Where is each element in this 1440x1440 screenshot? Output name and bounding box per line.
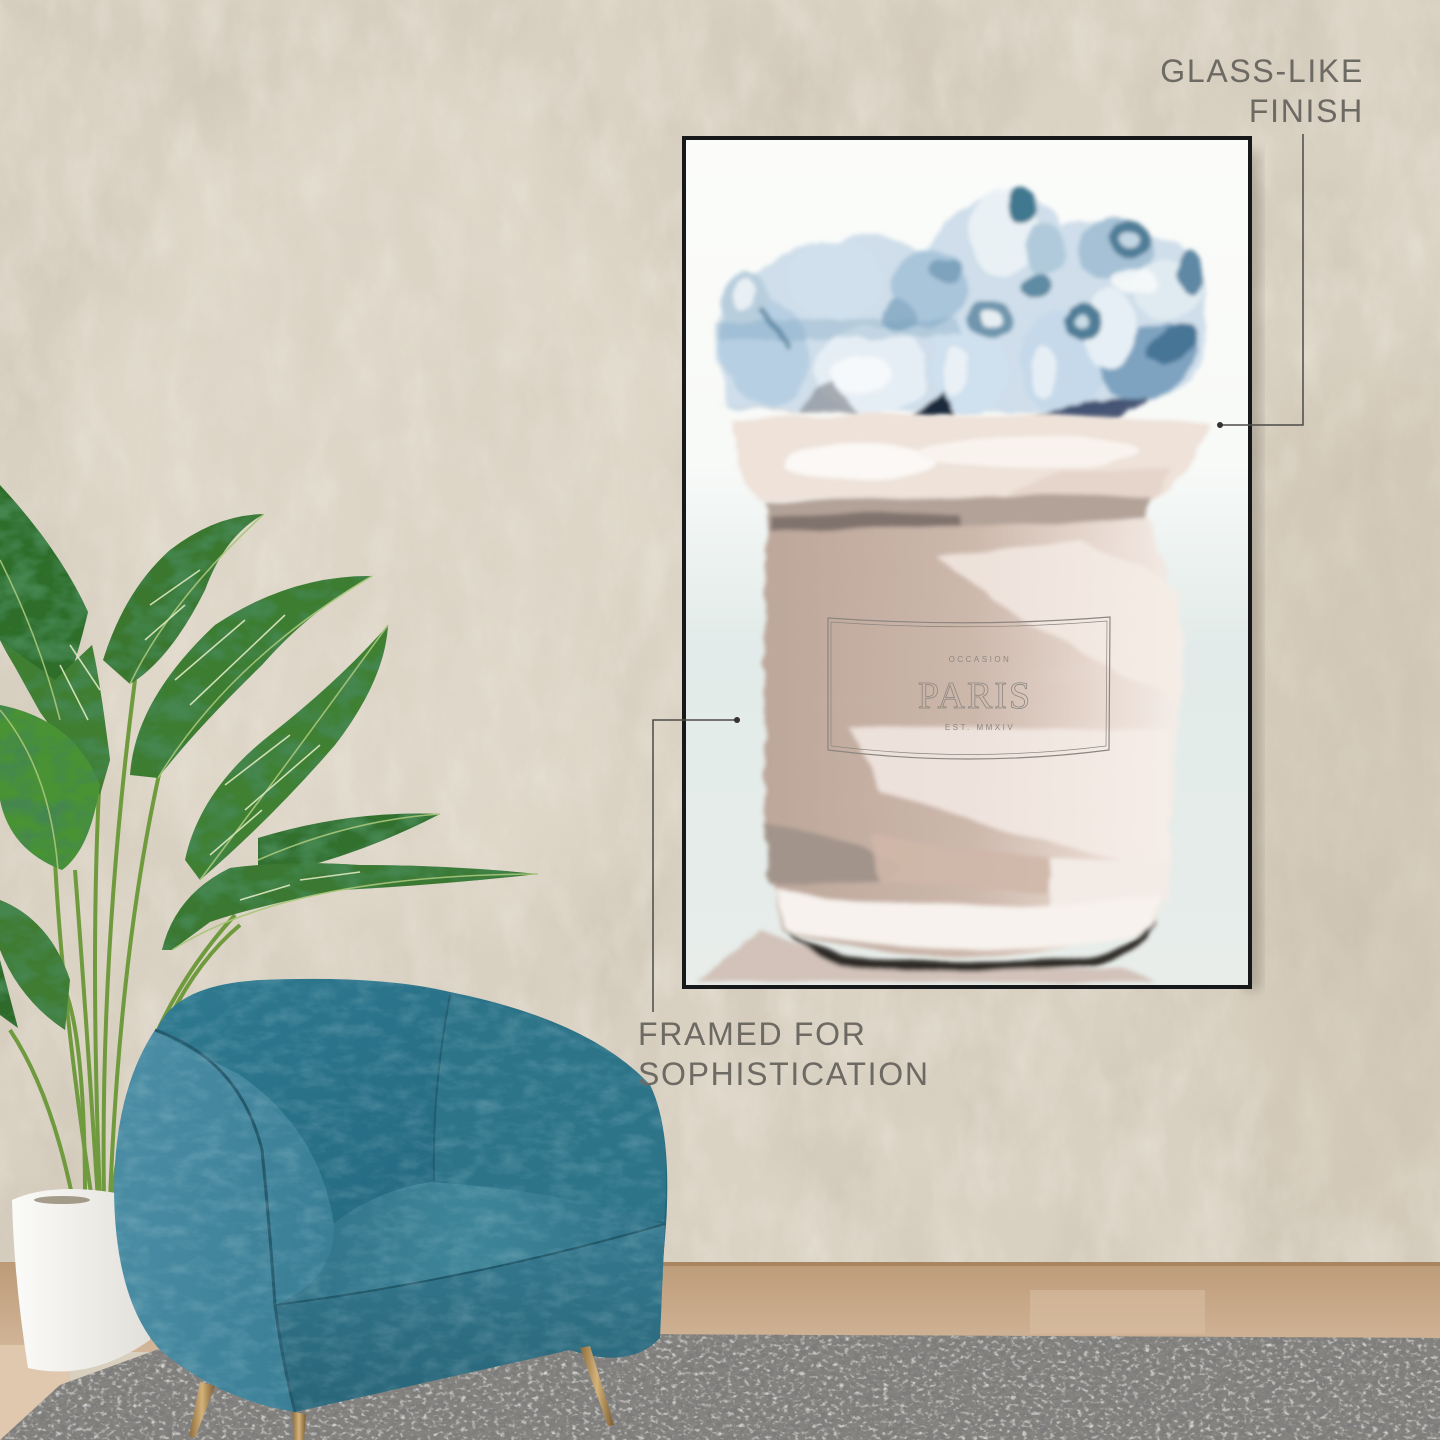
callout text: SOPHISTICATION bbox=[638, 1056, 930, 1092]
leaves bbox=[0, 485, 538, 1030]
callout text: FINISH bbox=[1249, 93, 1364, 129]
jar bbox=[696, 415, 1210, 982]
callout text: GLASS-LIKE bbox=[1160, 53, 1364, 89]
chair arm bbox=[114, 1030, 334, 1412]
wood floor bbox=[0, 1262, 1440, 1440]
velvet texture bbox=[114, 979, 667, 1412]
stems bbox=[10, 680, 240, 1200]
chair front apron bbox=[275, 1224, 665, 1412]
plant bbox=[0, 485, 538, 1372]
white pot bbox=[12, 1189, 150, 1372]
callout: glass-like finish bbox=[1160, 53, 1364, 428]
jar label text: PARIS bbox=[918, 675, 1032, 717]
leader line bbox=[653, 720, 737, 1012]
frame bbox=[682, 136, 1252, 989]
leaf ribs bbox=[0, 514, 538, 950]
jar label text bbox=[918, 655, 1032, 732]
blue flowers bbox=[705, 187, 1209, 420]
jar label bbox=[828, 617, 1110, 759]
grey rug bbox=[0, 1334, 1440, 1440]
leader dot bbox=[1217, 422, 1223, 428]
chair back bbox=[155, 979, 667, 1300]
jar label text: OCCASION bbox=[949, 655, 1011, 664]
frame shadow bbox=[1244, 150, 1260, 990]
blue armchair bbox=[114, 979, 667, 1440]
callout text: FRAMED FOR bbox=[638, 1016, 867, 1052]
chair seat cushion bbox=[275, 1182, 664, 1320]
leader dot bbox=[734, 717, 740, 723]
callout: framed for sophistication bbox=[638, 717, 930, 1092]
painting bbox=[686, 140, 1248, 985]
jar label text: EST. MMXIV bbox=[945, 723, 1015, 732]
leader line bbox=[1220, 134, 1303, 425]
framed artwork bbox=[682, 136, 1260, 990]
chair legs bbox=[580, 1346, 614, 1426]
